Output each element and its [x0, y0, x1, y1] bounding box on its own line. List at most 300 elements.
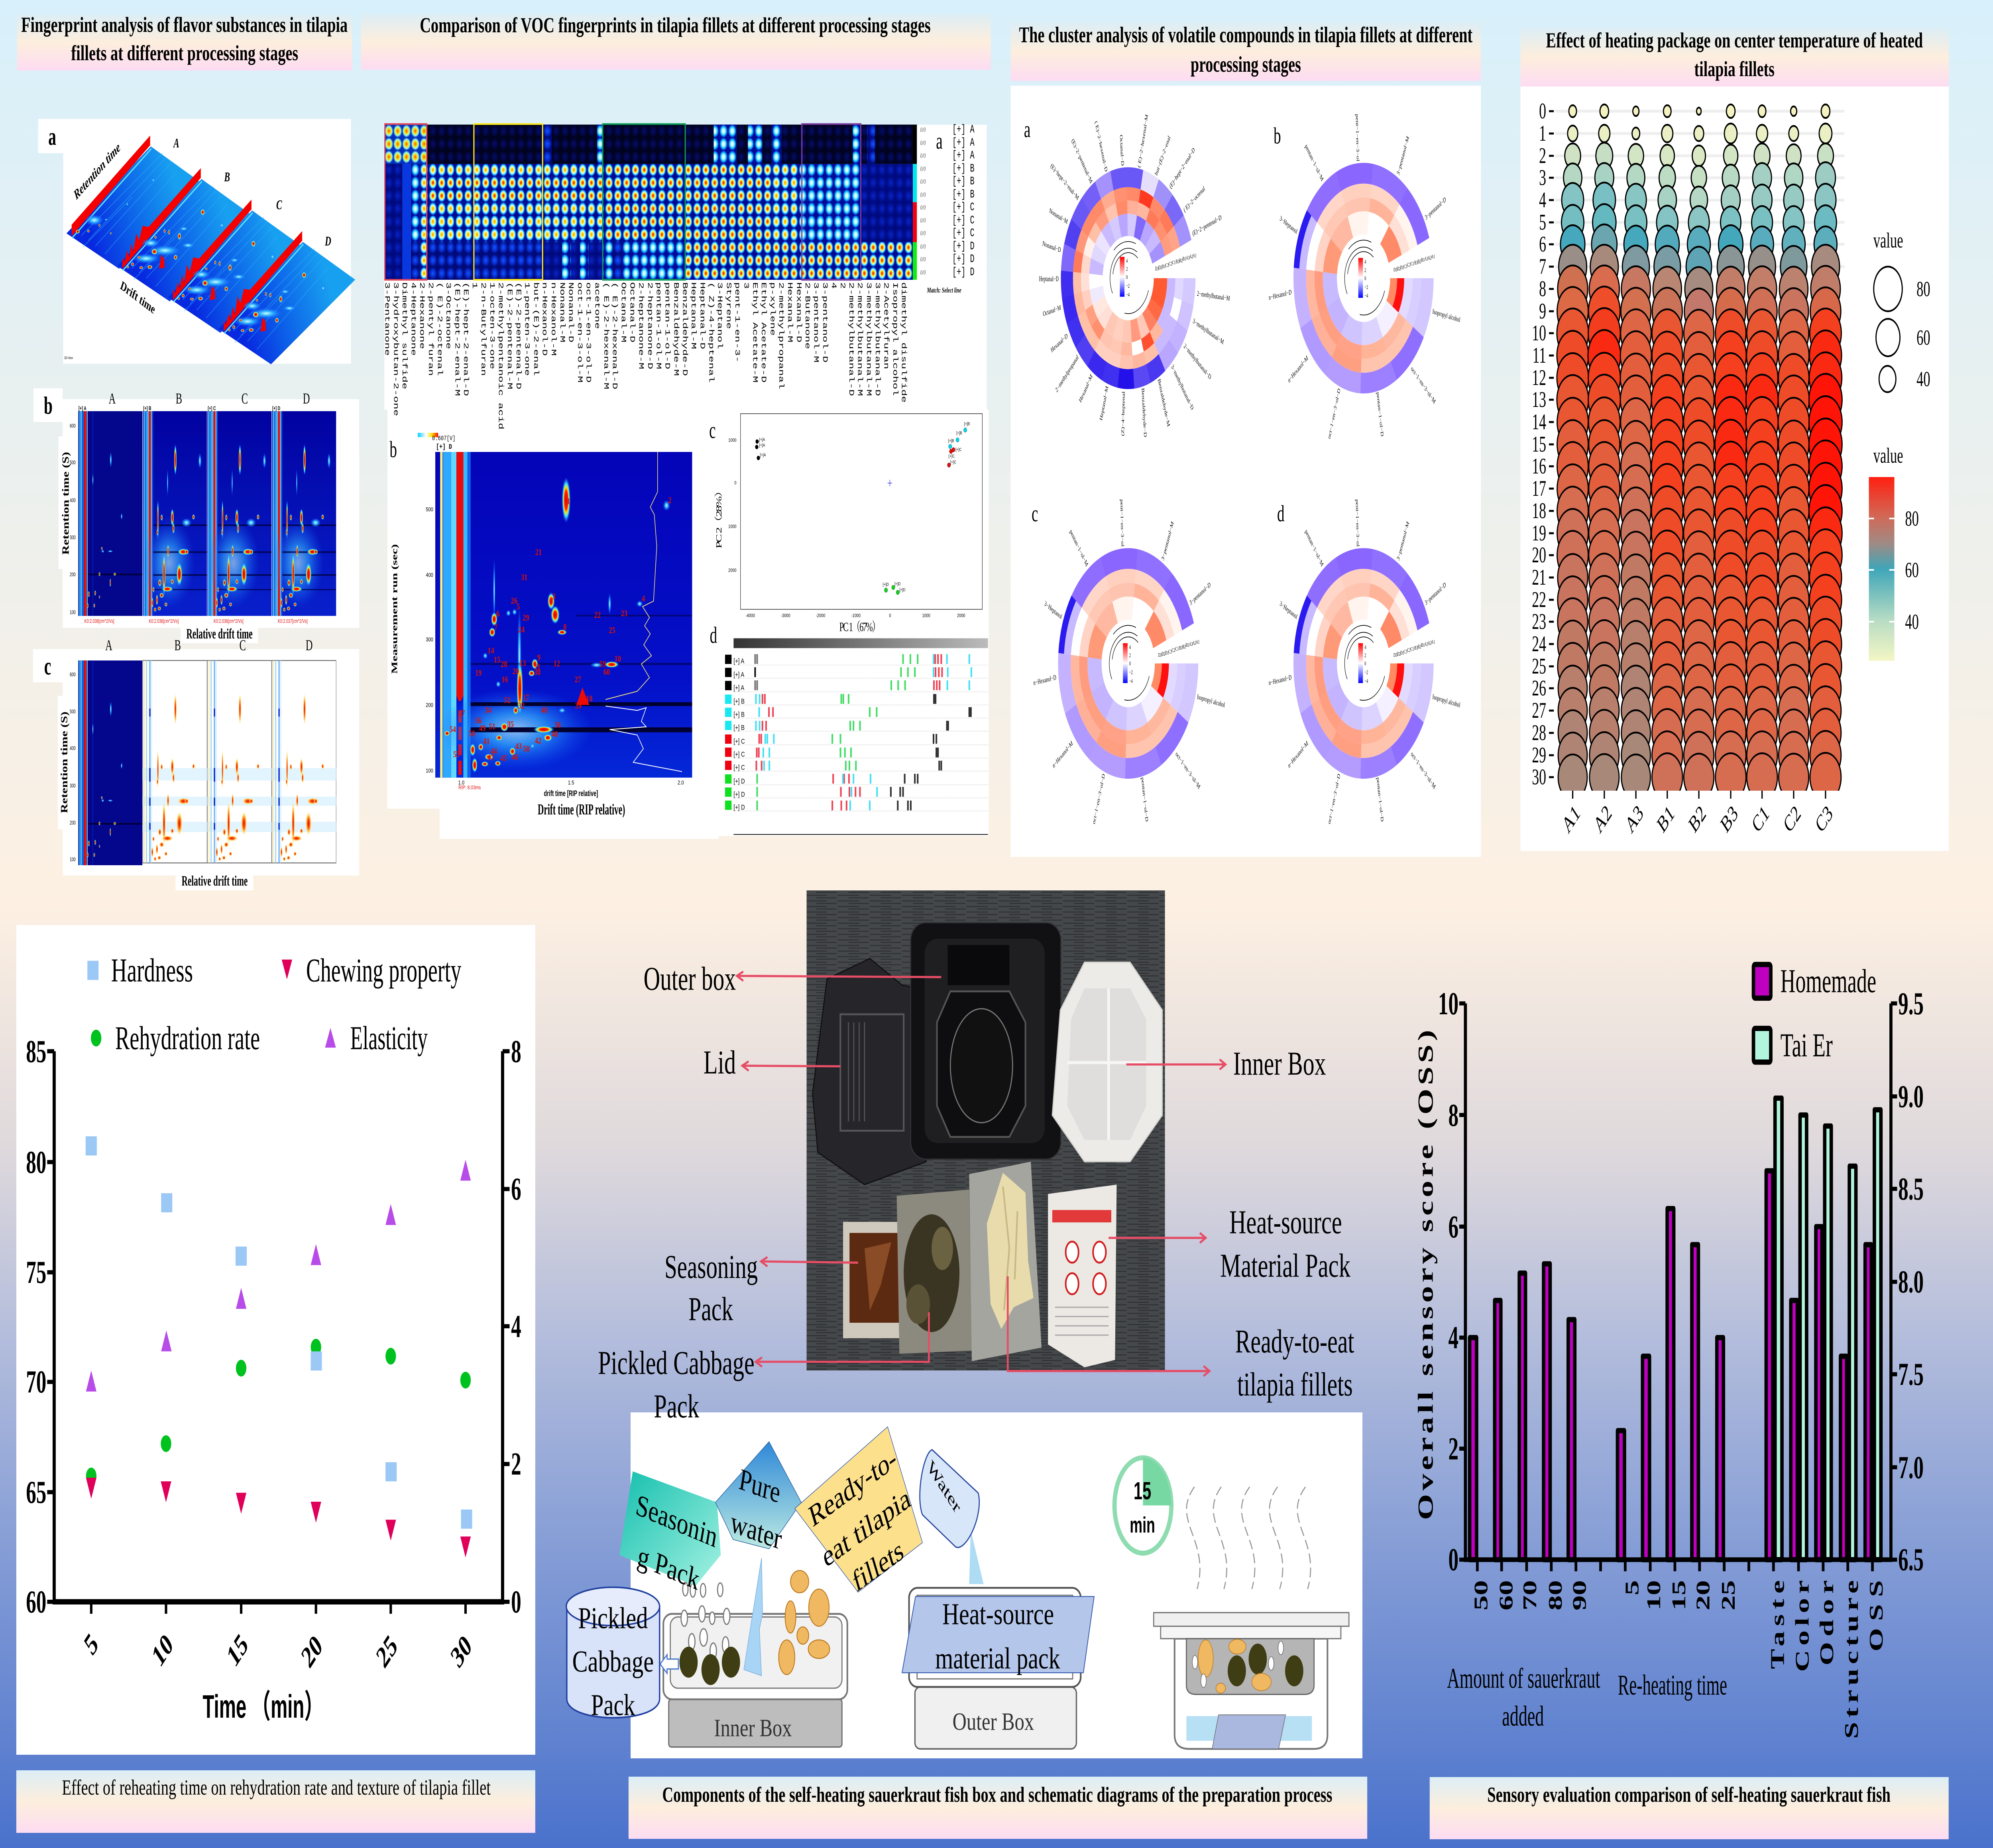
chart b: 2D topographic plots: Relative drift time [186, 626, 253, 642]
schematic preparation process: Seasonin [633, 1488, 720, 1554]
chart b: measurement run vs drift time: 2.0 [678, 779, 684, 786]
chart b: measurement run vs drift time: 29 [523, 613, 529, 623]
bar chart: 9.5 [1898, 986, 1924, 1021]
caption: reheating time: Effect of reheating time on rehydration rate and texture of tilapia fillet [62, 1775, 491, 1799]
chart b: measurement run vs drift time: drift time [RIP relative] [544, 789, 598, 798]
chart c: difference plots [33, 637, 359, 890]
component labels: Pack [688, 1291, 733, 1328]
chart b: 2D topographic plots: K0:2.036[cm^2/Vs] [214, 618, 244, 625]
x axis labels: groups: B3 [1717, 800, 1741, 838]
heading: VOC fingerprints: Comparison of VOC fingerprints in tilapia fillets at different processing stages [420, 13, 931, 37]
scatter chart: 20 [297, 1628, 327, 1675]
legend: colour scale: 60 [1905, 558, 1919, 582]
chart b: measurement run vs drift time: 32 [518, 701, 525, 711]
pickled cabbage pack cylinder [566, 1587, 678, 1718]
outer box drawing [909, 1588, 1081, 1749]
fish fillet pack [969, 1162, 1042, 1361]
chart a: gallery plot fingerprint: but-(E)-2-enal [532, 282, 540, 376]
chart a: gallery plot fingerprint: [+] C [952, 227, 975, 240]
y axis labels: minutes 0 to 30: 8 [1539, 277, 1546, 301]
chart b: measurement run vs drift time [389, 433, 692, 818]
chart a: gallery plot fingerprint: ( E)-2-octenal [435, 282, 444, 376]
chart b: measurement run vs drift time: 56 [475, 716, 482, 726]
chart c: difference plots: 600 [70, 672, 76, 678]
chart c: PCA scatter plot: -1000 [851, 613, 861, 619]
chart b: measurement run vs drift time: 1.5 [568, 779, 574, 786]
component labels: Inner Box [1233, 1045, 1326, 1082]
chart c: difference plots: Retention time (S) [59, 711, 69, 813]
chart b: measurement run vs drift time: 5 [517, 602, 520, 612]
chart b: measurement run vs drift time: 7 [494, 623, 497, 632]
legend: bubble size: 60 [1916, 326, 1930, 350]
scatter chart: 60 [26, 1584, 46, 1620]
caption: sensory evaluation [1430, 1777, 1949, 1839]
bar chart: 8.5 [1898, 1171, 1924, 1207]
circular heatmap a: 2−methylbutanal−M [1197, 290, 1230, 302]
scatter chart: 70 [26, 1364, 46, 1400]
chart c: PCA scatter plot: [+]C [950, 460, 956, 465]
chart a: gallery plot fingerprint: 0/0 [920, 191, 926, 199]
chart c: PCA scatter plot: 1000 [728, 524, 737, 530]
chart a: gallery plot fingerprint: 1 [470, 282, 478, 289]
chart a: gallery plot fingerprint: 0/0 [920, 230, 926, 238]
x axis labels: groups: A1 [1559, 800, 1583, 838]
scatter chart: 8 [511, 1033, 521, 1069]
chart a: gallery plot fingerprint: 2-Butanone [803, 282, 811, 349]
panel letters a b c d: b [1274, 123, 1281, 149]
panel letters a b c d: a [1024, 117, 1030, 142]
chart c: PCA scatter plot: 1000 [728, 438, 737, 443]
chart c: PCA scatter plot: PC 1（67%） [839, 620, 880, 634]
photo of kit components [807, 890, 1165, 1371]
chart a: gallery plot fingerprint: 2-Hexanone [418, 282, 426, 349]
y axis labels: minutes 0 to 30: 19 [1532, 521, 1546, 546]
chart b: 2D topographic plots [33, 388, 359, 643]
circular heatmap a: but−(E)−2−enal [1154, 134, 1171, 177]
chart c: PCA scatter plot: c [709, 418, 716, 443]
legend: colour scale [1869, 444, 1919, 661]
y axis labels: minutes 0 to 30: 2 [1539, 143, 1546, 168]
chart b: measurement run vs drift time: 58 [523, 744, 530, 754]
y axis labels: minutes 0 to 30: 22 [1532, 587, 1546, 612]
chart b: measurement run vs drift time: 14 [488, 646, 494, 656]
panel: reheating time scatter [16, 925, 535, 1833]
chart a: gallery plot fingerprint: 2-heptanone-M [637, 282, 645, 369]
chart c: PCA scatter plot: -4000 [745, 613, 755, 619]
chart a: gallery plot fingerprint: Heptanal-M [689, 282, 698, 349]
bar chart: Color [1791, 1580, 1813, 1672]
scatter chart: 80 [26, 1144, 46, 1180]
water cup [920, 1450, 984, 1584]
bar chart: added [1502, 1701, 1544, 1732]
chart b: measurement run vs drift time: 0.607[V] [432, 435, 456, 442]
schematic preparation process: Heat-source [942, 1597, 1054, 1631]
chart c: difference plots: D [306, 637, 313, 654]
bar chart: OSS [1865, 1580, 1887, 1652]
chart c: difference plots: A [105, 637, 112, 654]
bar chart: 9.0 [1898, 1078, 1924, 1114]
bar chart: 25 [1718, 1580, 1739, 1610]
chart b: measurement run vs drift time: RIP: 8.03ms [458, 784, 481, 791]
y axis labels: minutes 0 to 30: 21 [1532, 565, 1546, 590]
chart c: PCA scatter plot: [+]D [883, 582, 889, 587]
scatter chart: 2 [511, 1446, 521, 1482]
scatter chart: Rehydration rate [115, 1020, 260, 1057]
chart a: 3D topographic spectra: 3D-View [64, 356, 73, 360]
inner box drawing [663, 1558, 847, 1747]
component labels: Material Pack [1220, 1247, 1351, 1284]
chart b: measurement run vs drift time: 55 [453, 750, 460, 760]
chart b: measurement run vs drift time: 45 [500, 754, 507, 763]
circular heatmap a: (E)−hept−2−enal−M [1050, 162, 1079, 202]
chart a: gallery plot fingerprint: 3-hydroxybutan-2-one [391, 282, 400, 416]
chart a: gallery plot fingerprint: n-Hexanol-D [541, 282, 548, 356]
chart a: gallery plot fingerprint: (E)-2-pentenal-D [514, 282, 522, 389]
chart b: measurement run vs drift time: 1 [567, 497, 570, 507]
chart b: measurement run vs drift time: 25 [609, 626, 615, 635]
bar chart: 8.0 [1898, 1264, 1924, 1300]
schematic preparation process: Pack [591, 1688, 635, 1722]
inner box [1052, 962, 1162, 1162]
schematic preparation process: eat tilapia [818, 1481, 914, 1574]
legend: bubble size: 80 [1916, 277, 1930, 301]
schematic preparation process: water [729, 1505, 784, 1556]
bar chart: 6 [1448, 1209, 1458, 1245]
chart b: measurement run vs drift time: 36 [554, 721, 561, 730]
y axis labels: minutes 0 to 30: 0 [1539, 99, 1546, 124]
chart c: difference plots: B [175, 637, 181, 654]
x axis labels: groups: B2 [1685, 800, 1709, 838]
chart a: gallery plot fingerprint: (E)-hept-2-enal-M [453, 282, 461, 396]
chart c: difference plots: 200 [70, 820, 76, 826]
circular heatmap a: Benzaldehyde−D [1140, 388, 1148, 438]
scatter chart: 30 [446, 1628, 476, 1675]
chart c: difference plots: 400 [70, 745, 76, 752]
chart b: 2D topographic plots: 200 [70, 571, 76, 578]
chart a: gallery plot fingerprint: 0/0 [920, 126, 926, 134]
chart d: nearest neighbour fingerprint rows: [+] B [733, 698, 745, 705]
bar chart: 15 [1668, 1580, 1690, 1610]
chart a: gallery plot fingerprint: 4-Heptanone [409, 282, 417, 356]
chart b: measurement run vs drift time: 6 [496, 609, 499, 619]
chart b: 2D topographic plots: C [242, 390, 248, 407]
bar chart: 10 [1438, 986, 1458, 1021]
white panel background [384, 125, 989, 839]
bar chart: 8 [1448, 1097, 1458, 1133]
schematic preparation process: Inner Box [714, 1715, 792, 1742]
y axis labels: minutes 0 to 30: 6 [1539, 232, 1546, 257]
chart a: gallery plot fingerprint: dimethyl disulfide [900, 282, 908, 403]
chart a: gallery plot fingerprint: [+] C [952, 214, 975, 227]
chart a: gallery plot fingerprint: pentan-1-ol-D [663, 282, 671, 369]
heading: center temperature: Effect of heating package on center temperature of heated [1546, 28, 1923, 52]
chart c: difference plots: 100 [70, 856, 76, 863]
circular heatmap a: 2−methylbutanal−D [1183, 342, 1212, 381]
heading: center temperature: tilapia fillets [1694, 57, 1775, 81]
y axis labels: minutes 0 to 30: 7 [1539, 254, 1546, 279]
chart a: gallery plot fingerprint [383, 124, 975, 430]
circular heatmap a: ( E)−2−hexenal−D [1094, 120, 1108, 173]
caption: reheating time [16, 1770, 535, 1833]
chart c: difference plots: Relative drift time [182, 873, 248, 889]
chart a: gallery plot fingerprint: [+] A [952, 124, 975, 136]
circular heatmap a: 3−methylbutanal−D [1170, 363, 1194, 412]
chart b: measurement run vs drift time: 400 [426, 571, 433, 578]
chart b: 2D topographic plots: K0:2.037[cm^2/Vs] [278, 618, 308, 625]
schematic preparation process: Ready-to- [805, 1440, 900, 1534]
chart b: measurement run vs drift time: 44 [491, 746, 497, 756]
chart a: gallery plot fingerprint: [+] C [952, 201, 975, 214]
chart a: gallery plot fingerprint: [+] D [952, 253, 975, 266]
chart a: gallery plot fingerprint: Octanal-M [619, 282, 627, 342]
chart b: measurement run vs drift time: 41 [483, 737, 490, 746]
chart b: measurement run vs drift time: 48 [541, 706, 548, 715]
x axis labels: groups: C3 [1812, 800, 1836, 838]
circular heatmap a: ( E)−2−hexenal−M [1137, 114, 1149, 169]
chart a: gallery plot fingerprint: Ethyl Acetate-M [751, 282, 759, 383]
x axis labels: groups: A3 [1622, 800, 1647, 838]
chart b: measurement run vs drift time: 40 [552, 730, 558, 739]
chart a: gallery plot fingerprint: 2-Acetylfuran [882, 282, 890, 369]
y axis labels: minutes 0 to 30: 12 [1532, 365, 1546, 390]
scatter chart: 4 [511, 1308, 521, 1344]
panel: VOC fingerprints [361, 13, 991, 839]
chart d: nearest neighbour fingerprint rows: [+] B [733, 711, 745, 719]
chart d: nearest neighbour fingerprint rows: [+] D [733, 778, 745, 785]
bar chart: 50 [1470, 1580, 1492, 1610]
chart d: nearest neighbour fingerprint rows: [+] C [733, 751, 745, 758]
chart d: nearest neighbour fingerprint rows: [+] C [733, 764, 745, 772]
circular heatmap a: (E)−2−pentenal−M [1071, 137, 1093, 185]
chart c: PCA scatter plot: [+]D [894, 582, 900, 587]
legend: colour scale: 80 [1905, 507, 1919, 530]
schematic preparation process: g Pack [635, 1538, 702, 1597]
y axis labels: minutes 0 to 30: 18 [1532, 499, 1546, 523]
y axis labels: minutes 0 to 30 [1532, 99, 1554, 789]
chart b: measurement run vs drift time: 4 [642, 594, 645, 604]
chart b: measurement run vs drift time: 17 [523, 693, 529, 703]
chart b: measurement run vs drift time: 47 [488, 753, 494, 763]
bar chart: 80 [1544, 1580, 1566, 1610]
chart a: gallery plot fingerprint: Match: Select line [927, 287, 961, 295]
chart c: PCA scatter plot: -2000 [816, 613, 825, 619]
chart b: measurement run vs drift time: 60 [603, 668, 610, 677]
chart c: PCA scatter plot: 0 [734, 480, 737, 486]
chart b: measurement run vs drift time: 27 [575, 675, 581, 685]
chart b: measurement run vs drift time: [+] D [436, 443, 452, 451]
y axis labels: minutes 0 to 30: 26 [1532, 676, 1546, 701]
chart a: gallery plot fingerprint: 3-pentanol-M [812, 282, 820, 363]
chart a: gallery plot fingerprint: 3-Octanone [444, 282, 452, 349]
scatter chart: 0 [511, 1584, 521, 1620]
circular heatmap a: Nonanal−M [1048, 207, 1068, 226]
chart c: PCA scatter plot: [+]C [949, 454, 955, 459]
circular heatmap a: Benzaldehyde−M [1157, 378, 1171, 428]
circular heatmap a: Hexanal−M [1078, 373, 1094, 405]
chart a: gallery plot fingerprint: Heptanal-D [698, 282, 706, 349]
y axis labels: minutes 0 to 30: 11 [1533, 343, 1546, 368]
bar chart: 70 [1519, 1580, 1540, 1610]
bar chart: 0 [1448, 1542, 1458, 1577]
circular heatmap a: Hexanal−D [1050, 332, 1069, 354]
chart a: gallery plot fingerprint: Hexanal-M [786, 282, 794, 342]
chart b: 2D topographic plots: [+] B [143, 405, 151, 412]
scatter chart [26, 952, 521, 1725]
y axis labels: minutes 0 to 30: 29 [1532, 743, 1546, 768]
chart a: 3D topographic spectra: Retention time [72, 140, 122, 203]
bar chart: 4 [1448, 1320, 1458, 1355]
chart c: PCA scatter plot: [+]B [956, 431, 962, 436]
legend: colour scale: 40 [1905, 610, 1919, 634]
chart a: 3D topographic spectra: B [224, 170, 230, 185]
panel: sensory evaluation [1414, 963, 1949, 1839]
y axis labels: minutes 0 to 30: 27 [1532, 698, 1546, 723]
circular heatmap a: Octanal−D [1119, 134, 1125, 166]
schematic preparation process: Outer Box [953, 1709, 1034, 1736]
heading: fingerprint analysis: fillets at different processing stages [71, 41, 298, 65]
bar chart: 60 [1495, 1580, 1517, 1610]
chart b: measurement run vs drift time: 59 [599, 660, 606, 669]
bar chart: 6.5 [1898, 1542, 1924, 1577]
chart a: gallery plot fingerprint: 2-methylbutanal-M [856, 282, 864, 396]
chart c: PCA scatter plot: -3000 [781, 613, 790, 619]
chart b: measurement run vs drift time: 54 [450, 725, 456, 734]
chart c: PCA scatter plot: [+]B [964, 422, 970, 426]
chart b: 2D topographic plots: [+] D [272, 405, 280, 412]
circular heatmap a: Nonanal−D [1042, 240, 1061, 254]
chart a: gallery plot fingerprint: Isopropyl alcohol [891, 282, 899, 396]
legend: bubble size: value [1873, 228, 1903, 252]
chart b: measurement run vs drift time: 22 [594, 611, 601, 620]
chart b: measurement run vs drift time: 8 [563, 623, 567, 632]
bar chart: 7.0 [1898, 1449, 1924, 1485]
y axis labels: minutes 0 to 30: 13 [1532, 387, 1546, 412]
chart a: gallery plot fingerprint: oct-1-en-3-ol-M [576, 282, 584, 383]
chart b: measurement run vs drift time: 200 [426, 701, 433, 708]
chart b: measurement run vs drift time: 12 [554, 659, 560, 669]
chart c: PCA scatter plot: 0 [889, 613, 891, 619]
y axis labels: minutes 0 to 30: 30 [1532, 765, 1546, 789]
bar chart: Odor [1816, 1580, 1837, 1665]
circular heatmap c [1033, 499, 1225, 825]
pure water sachet [715, 1441, 801, 1549]
schematic preparation process: Pack [654, 1388, 700, 1425]
chart a: gallery plot fingerprint: 3-Heptanol [715, 282, 724, 349]
x axis labels: groups: C2 [1780, 800, 1804, 838]
chart b: measurement run vs drift time: 500 [426, 506, 433, 513]
chart a: gallery plot fingerprint: [+] B [952, 189, 975, 201]
chart a: gallery plot fingerprint: Benzaldehyde-D [680, 282, 689, 376]
y axis labels: minutes 0 to 30: 16 [1532, 454, 1546, 479]
chart a: gallery plot fingerprint: 0/0 [920, 152, 926, 160]
chart b: measurement run vs drift time: 21 [535, 548, 542, 557]
chart a: gallery plot fingerprint: acetone [593, 282, 601, 329]
white chart background [16, 925, 535, 1755]
y axis labels: minutes 0 to 30: 5 [1539, 210, 1546, 235]
pickled cabbage pack [897, 1190, 972, 1354]
chart b: 2D topographic plots: K0:2.036[cm^2/Vs] [149, 618, 179, 625]
bar chart [1414, 963, 1924, 1739]
chart a: gallery plot fingerprint: 3-Pentanone [383, 282, 391, 356]
chart b: measurement run vs drift time: 31 [521, 573, 527, 582]
bar chart: 7.5 [1898, 1356, 1924, 1392]
chart c: difference plots: C [240, 637, 246, 654]
chart d: nearest neighbour fingerprint rows: [+] D [733, 804, 745, 811]
chart a: gallery plot fingerprint: Hexanal-D [794, 282, 803, 342]
chart b: 2D topographic plots: B [176, 390, 182, 407]
chart a: gallery plot fingerprint: 2-methylpentanoic acid [497, 282, 505, 430]
circular heatmap a [1039, 114, 1230, 438]
heading: cluster analysis [1010, 22, 1481, 81]
schematic preparation process: Water [924, 1457, 963, 1517]
chart b: measurement run vs drift time: 26 [511, 596, 517, 606]
chart a: 3D topographic spectra: Drift time [119, 278, 157, 317]
component labels: Ready-to-eat [1235, 1323, 1354, 1360]
chart a: gallery plot fingerprint: pentan-1-ol-M [654, 282, 662, 369]
bubble grid [1555, 104, 1844, 801]
chart a: gallery plot fingerprint: Benzaldehyde-M [672, 282, 680, 376]
scatter chart: Elasticity [350, 1020, 428, 1057]
panel: center temperature bubble chart [1520, 28, 1949, 851]
chart b: measurement run vs drift time: 43 [515, 742, 522, 751]
circular heatmap a: Octanal−M [1042, 304, 1061, 318]
chart b: measurement run vs drift time: Drift time (RIP relative) [538, 801, 625, 818]
circular heatmap a: Heptanal−M [1099, 385, 1109, 422]
heading: cluster analysis: processing stages [1191, 52, 1301, 77]
chart b: measurement run vs drift time: 50 [469, 729, 475, 738]
chart c: PCA scatter plot [709, 414, 982, 634]
y axis labels: minutes 0 to 30: 3 [1539, 165, 1546, 190]
chart a: gallery plot fingerprint: 0/0 [920, 139, 926, 147]
y axis labels: minutes 0 to 30: 10 [1532, 321, 1546, 346]
chart c: PCA scatter plot: [+]A [759, 443, 765, 448]
chart d: nearest neighbour fingerprint rows: [+] A [733, 684, 745, 692]
chart a: gallery plot fingerprint: oct-1-en-3-ol-D [584, 282, 592, 383]
chart a: gallery plot fingerprint: 0/0 [920, 165, 926, 173]
chart d: nearest neighbour fingerprint rows: d [710, 623, 717, 648]
chart c: PCA scatter plot: PC 2（28%） [714, 485, 723, 548]
schematic preparation process: 15 [1134, 1477, 1151, 1505]
arrows [737, 972, 1226, 1376]
chart a: gallery plot fingerprint: Nonanal-D [566, 282, 575, 342]
bar chart: Re-heating time [1618, 1669, 1727, 1701]
chart c: difference plots: 500 [70, 709, 76, 715]
chart b: measurement run vs drift time: 3 [552, 592, 556, 601]
chart a: gallery plot fingerprint: 3 [742, 282, 750, 289]
circular heatmap a: (E)−2−pentenal−D [1192, 214, 1222, 238]
chart a: gallery plot fingerprint: 2-pentyl furan [427, 282, 434, 376]
heading: fingerprint analysis: Fingerprint analysis of flavor substances in tilapia [21, 13, 348, 37]
bar chart: 10 [1643, 1580, 1665, 1610]
chart b: 2D topographic plots: D [303, 390, 310, 407]
chart b: 2D topographic plots: A [109, 390, 116, 407]
chart a: gallery plot fingerprint: (E)-hept-2-enal-D [462, 282, 470, 396]
heat-source pack tile [902, 1597, 1094, 1673]
chart a: gallery plot fingerprint: Ethyl Acetate-D [759, 282, 767, 383]
scatter chart: Time （min） [202, 1688, 323, 1725]
circular heatmap a: ( E)−2−octenal [1183, 185, 1206, 214]
chart b: 2D topographic plots: 500 [70, 460, 76, 466]
lid [812, 958, 926, 1184]
schematic preparation process: min [1130, 1512, 1155, 1538]
scatter chart: 25 [372, 1628, 402, 1675]
heading: cluster analysis: The cluster analysis of volatile compounds in tilapia fillets at different [1019, 23, 1472, 47]
component labels: tilapia fillets [1237, 1366, 1353, 1403]
chart a: gallery plot fingerprint: [+] B [952, 163, 975, 175]
circular heatmap a: 3−methylbutanal−M [1192, 317, 1224, 346]
circular heatmap d [1268, 499, 1460, 825]
timer icon [1114, 1458, 1171, 1553]
